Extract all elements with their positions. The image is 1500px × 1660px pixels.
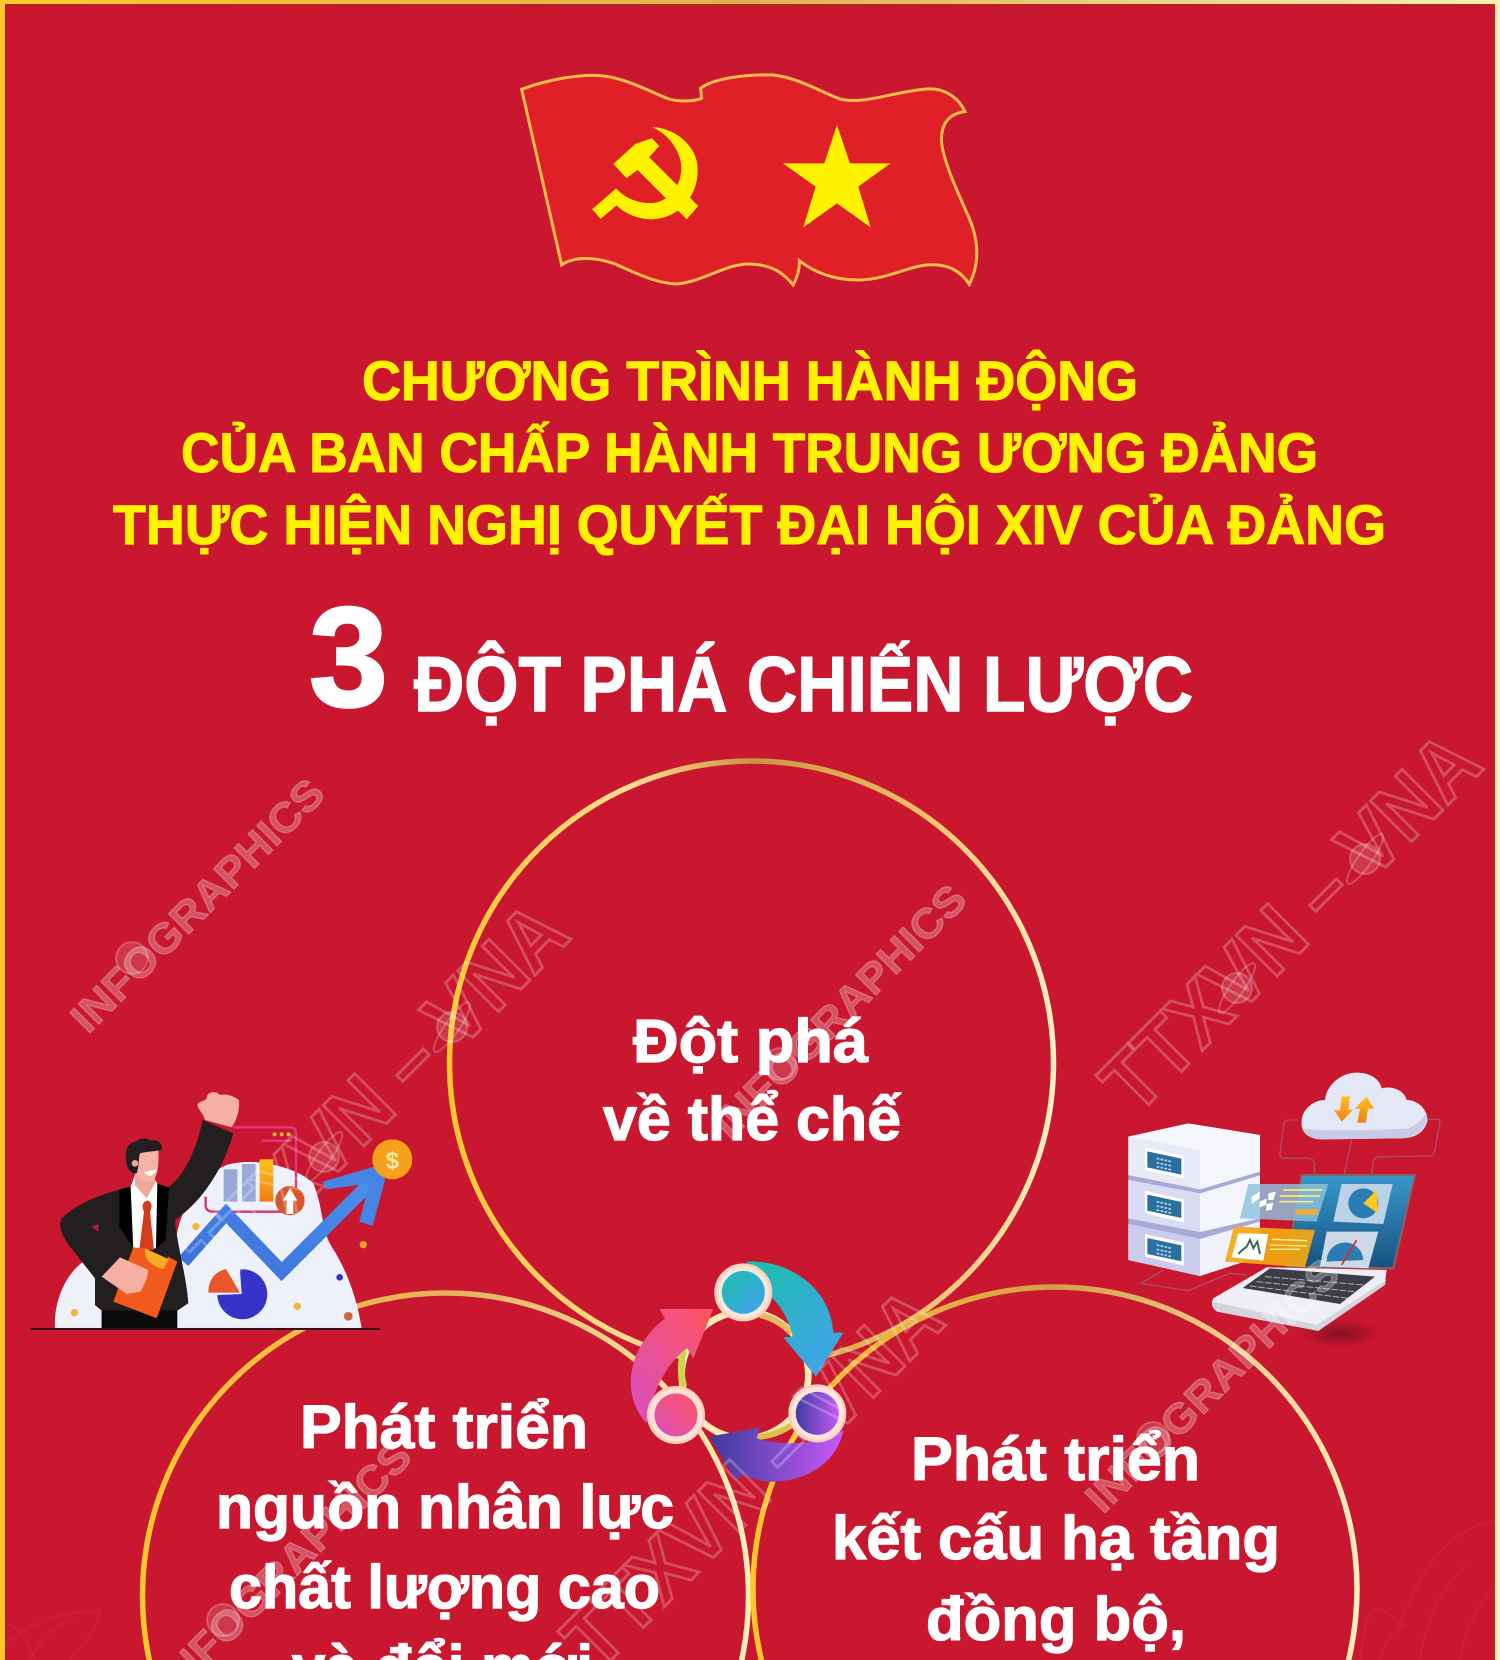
title: CHƯƠNG TRÌNH HÀNH ĐỘNG	[362, 349, 1138, 412]
text: human resources	[216, 1393, 674, 1660]
icon: server, cloud and laptop	[1128, 1073, 1440, 1347]
ring: top circle	[450, 761, 1054, 1365]
heading: 3 strategic breakthroughs: 3	[309, 578, 388, 737]
text: infrastructure: kết cấu hạ tầng	[832, 1504, 1280, 1572]
text: infrastructure: Phát triển	[911, 1425, 1200, 1493]
title: CỦA BAN CHẤP HÀNH TRUNG ƯƠNG ĐẢNG	[181, 421, 1318, 484]
watermark: TTXVN – VNA outlined repeats	[169, 714, 1498, 1660]
icon: businessman with growth chart	[30, 1092, 412, 1330]
text: institutional breakthrough: Đột phá	[633, 1007, 869, 1075]
lotus line art, bottom corners	[0, 1520, 1500, 1660]
ring: right circle	[753, 1287, 1357, 1660]
text: institutional breakthrough	[603, 1007, 901, 1153]
ring: left circle	[142, 1293, 748, 1660]
text: human resources: chất lượng cao	[229, 1553, 660, 1621]
watermark: INFOGRAPHICS repeats: INFOGRAPHICS	[1076, 1249, 1348, 1521]
title: THỰC HIỆN NGHỊ QUYẾT ĐẠI HỘI XIV CỦA ĐẢNG	[113, 493, 1386, 556]
watermark: INFOGRAPHICS repeats: INFOGRAPHICS	[61, 769, 333, 1041]
watermark: TTXVN – VNA outlined repeats: TTXVN – VNA	[169, 884, 585, 1300]
heading: 3 strategic breakthroughs	[309, 578, 1193, 737]
title	[113, 349, 1386, 556]
icon: businessman with growth chart: $	[386, 1147, 399, 1174]
icon: party flag with hammer and sickle and star	[522, 75, 977, 285]
text: infrastructure: đồng bộ,	[926, 1585, 1186, 1653]
watermark globes	[116, 830, 1388, 1636]
watermark: INFOGRAPHICS repeats: INFOGRAPHICS	[703, 875, 975, 1147]
watermark: INFOGRAPHICS repeats	[61, 769, 1348, 1660]
text: human resources: Phát triển	[300, 1393, 588, 1461]
text: institutional breakthrough: về thể chế	[603, 1085, 901, 1153]
text: human resources: nguồn nhân lực	[216, 1473, 674, 1541]
heading: 3 strategic breakthroughs: ĐỘT PHÁ CHIẾN LƯỢC	[414, 640, 1193, 728]
text: infrastructure	[832, 1425, 1280, 1653]
icon: circular cycle of three arrows	[631, 1262, 845, 1482]
